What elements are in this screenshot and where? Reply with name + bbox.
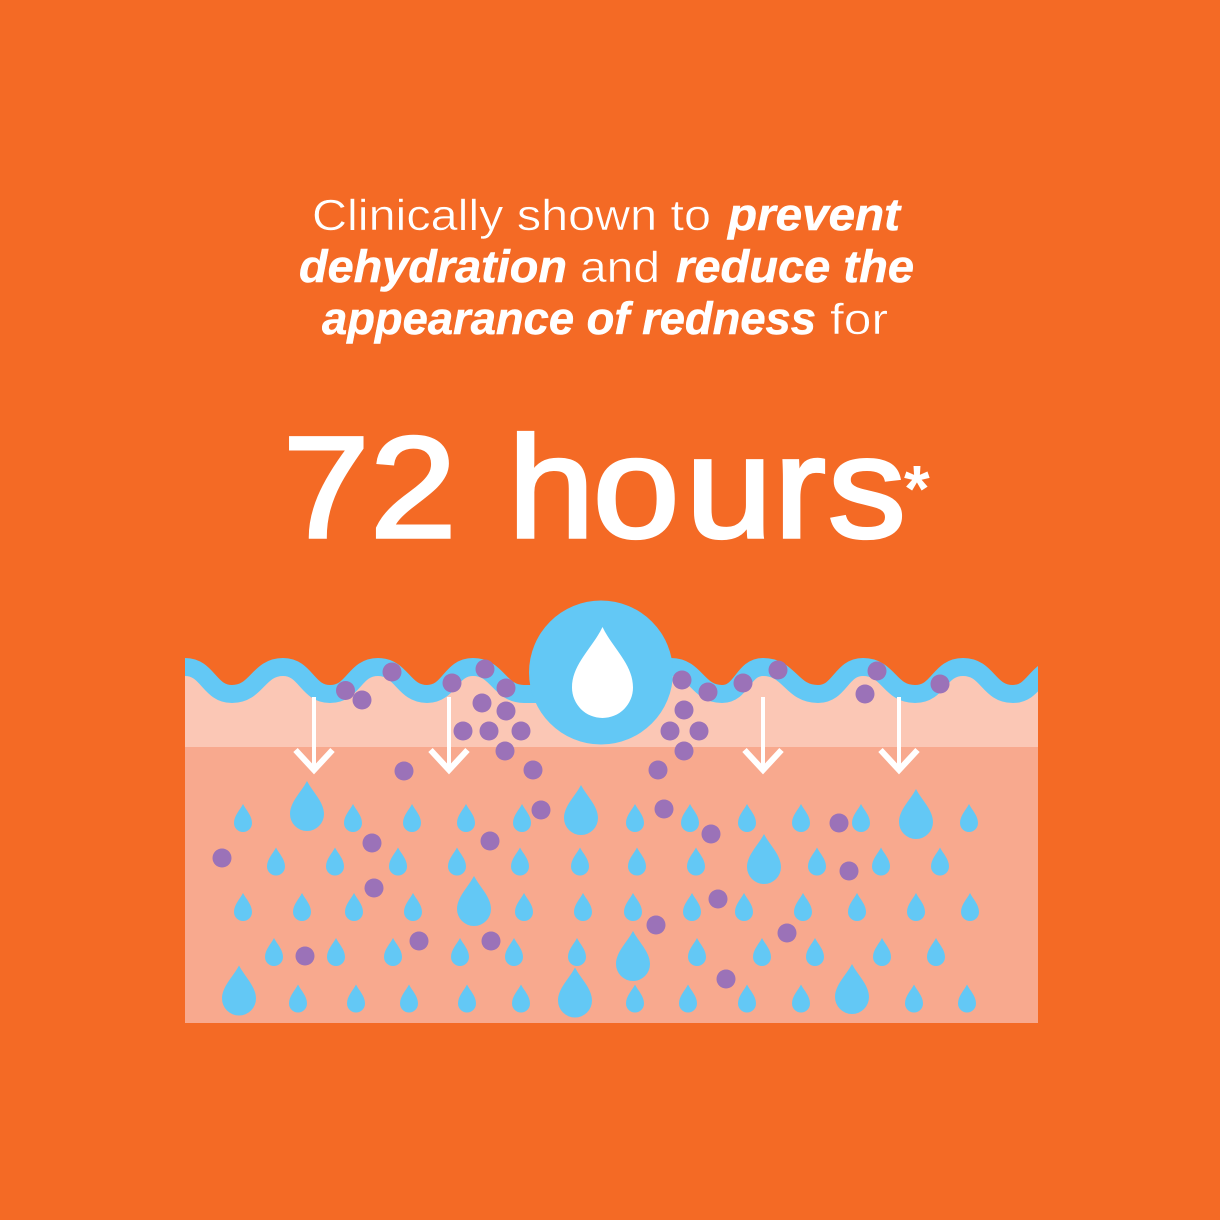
white downward arrows <box>296 697 918 770</box>
headline text: reduce the <box>676 241 914 292</box>
headline text: Clinically shown to <box>312 191 711 240</box>
infographic canvas <box>185 198 1038 1023</box>
big statistic: 72 hours <box>283 406 930 568</box>
big statistic: 72 hours: 72 <box>283 406 457 568</box>
blue moisture barrier wave <box>138 667 1061 694</box>
headline text: dehydration <box>299 241 567 292</box>
headline text: for <box>830 295 888 344</box>
upper skin layer <box>185 676 1038 747</box>
lower skin layer <box>185 747 1038 1023</box>
headline text <box>299 189 914 344</box>
headline text: appearance of redness <box>322 293 816 344</box>
big statistic: 72 hours: * <box>904 452 930 526</box>
icon: water drop in circle <box>529 600 673 744</box>
headline text: prevent <box>727 189 902 240</box>
hydration droplets <box>222 781 979 1018</box>
skin diagram <box>138 600 1061 1023</box>
big statistic: 72 hours: hours <box>508 406 906 568</box>
purple irritant particles <box>212 660 950 988</box>
headline text: and <box>580 243 660 292</box>
